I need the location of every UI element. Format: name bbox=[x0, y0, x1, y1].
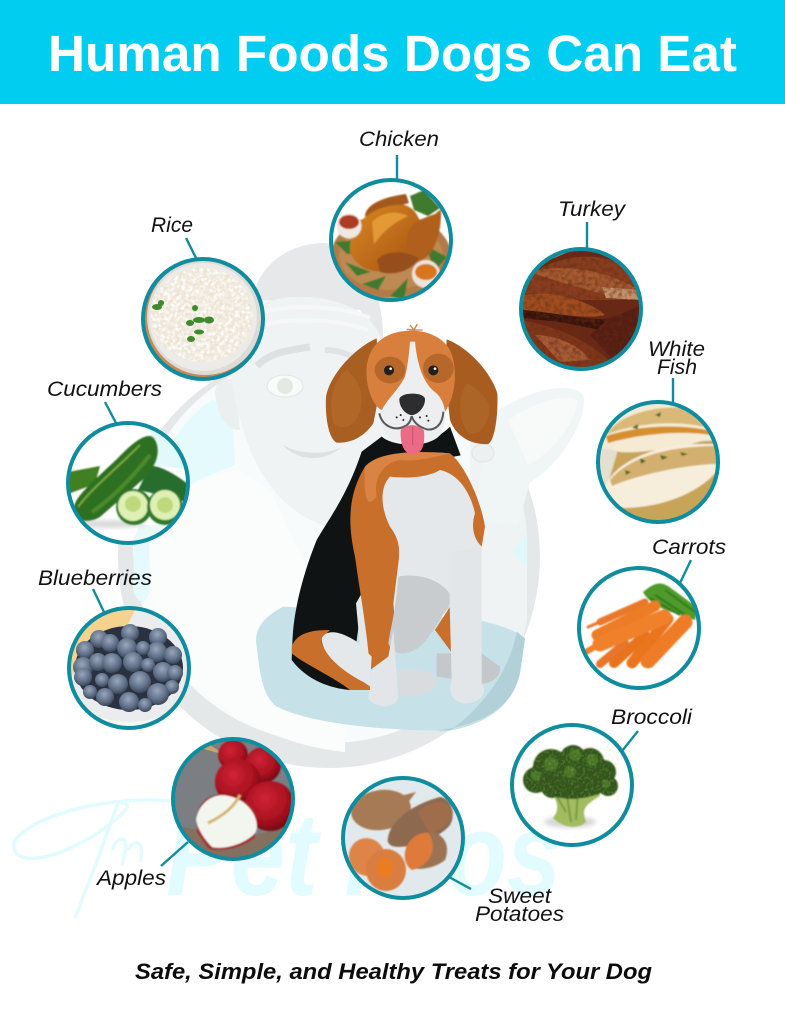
photo: roast chicken bbox=[333, 190, 449, 298]
connector: sweet potatoes bbox=[449, 877, 471, 889]
label: chicken: Chicken bbox=[359, 128, 439, 151]
food: Sweet Potatoes bbox=[341, 776, 565, 926]
ring: apples bbox=[173, 739, 293, 859]
photo: white fish fillets bbox=[600, 404, 716, 520]
food: Blueberries bbox=[38, 567, 191, 730]
photo: broccoli bbox=[522, 744, 619, 840]
watermark: brand logotype bbox=[14, 789, 561, 921]
food: Broccoli bbox=[510, 706, 693, 847]
food: White Fish bbox=[596, 338, 720, 524]
connector: chicken bbox=[396, 155, 398, 180]
ring: turkey bbox=[521, 249, 641, 369]
label: white fish: Fish bbox=[657, 356, 697, 379]
food: Carrots bbox=[577, 536, 727, 690]
ring: white fish bbox=[598, 402, 718, 522]
connector: broccoli bbox=[622, 731, 638, 751]
food: Turkey bbox=[519, 198, 643, 372]
ring: chicken bbox=[331, 180, 451, 300]
food: Rice bbox=[141, 214, 265, 381]
central beagle illustration bbox=[256, 324, 525, 731]
label: white fish: White bbox=[648, 338, 705, 361]
connector: rice bbox=[186, 238, 197, 260]
food: Apples bbox=[95, 737, 295, 890]
photo: cucumbers bbox=[70, 430, 186, 541]
watermark: brand logotype: Pet Pros bbox=[166, 789, 561, 921]
title: Human Foods Dogs Can Eat bbox=[48, 25, 737, 82]
photo: carrots bbox=[584, 582, 696, 668]
photo: roast turkey bbox=[523, 251, 639, 367]
ring: broccoli bbox=[512, 725, 632, 845]
ring: sweet potatoes bbox=[343, 778, 463, 898]
photo: sweet potatoes bbox=[345, 780, 461, 896]
ring: carrots bbox=[579, 568, 699, 688]
watermark: brand mascot illustration bbox=[118, 243, 584, 768]
label: sweet potatoes bbox=[475, 885, 565, 926]
tagline: Safe, Simple, and Healthy Treats for Your Dog bbox=[135, 959, 652, 984]
connector: blueberries bbox=[93, 589, 104, 612]
label: turkey: Turkey bbox=[558, 198, 627, 221]
ring: rice bbox=[143, 259, 263, 379]
label: white fish bbox=[648, 338, 705, 379]
mat bbox=[256, 607, 525, 731]
photo: blueberries bbox=[71, 610, 187, 726]
connector: cucumbers bbox=[105, 402, 116, 423]
label: sweet potatoes: Sweet bbox=[488, 885, 552, 908]
ring: blueberries bbox=[69, 608, 189, 728]
food: Cucumbers bbox=[47, 378, 190, 545]
label: rice: Rice bbox=[151, 214, 193, 237]
label: apples: Apples bbox=[95, 867, 167, 890]
label: cucumbers: Cucumbers bbox=[47, 378, 163, 401]
connector: turkey bbox=[586, 222, 588, 248]
title banner bbox=[0, 0, 785, 104]
food: Chicken bbox=[331, 128, 451, 300]
head bbox=[366, 324, 455, 455]
label: carrots: Carrots bbox=[652, 536, 727, 559]
connector: carrots bbox=[680, 560, 691, 583]
label: broccoli: Broccoli bbox=[611, 706, 693, 729]
photo: apples bbox=[175, 741, 291, 857]
ears bbox=[326, 338, 498, 444]
label: sweet potatoes: Potatoes bbox=[475, 903, 565, 926]
label: blueberries: Blueberries bbox=[38, 567, 153, 590]
photo: rice bowl bbox=[145, 261, 261, 377]
connector: apples bbox=[161, 842, 188, 866]
dog body bbox=[292, 427, 500, 706]
connector: white fish bbox=[672, 378, 674, 403]
ring: cucumbers bbox=[68, 423, 188, 543]
